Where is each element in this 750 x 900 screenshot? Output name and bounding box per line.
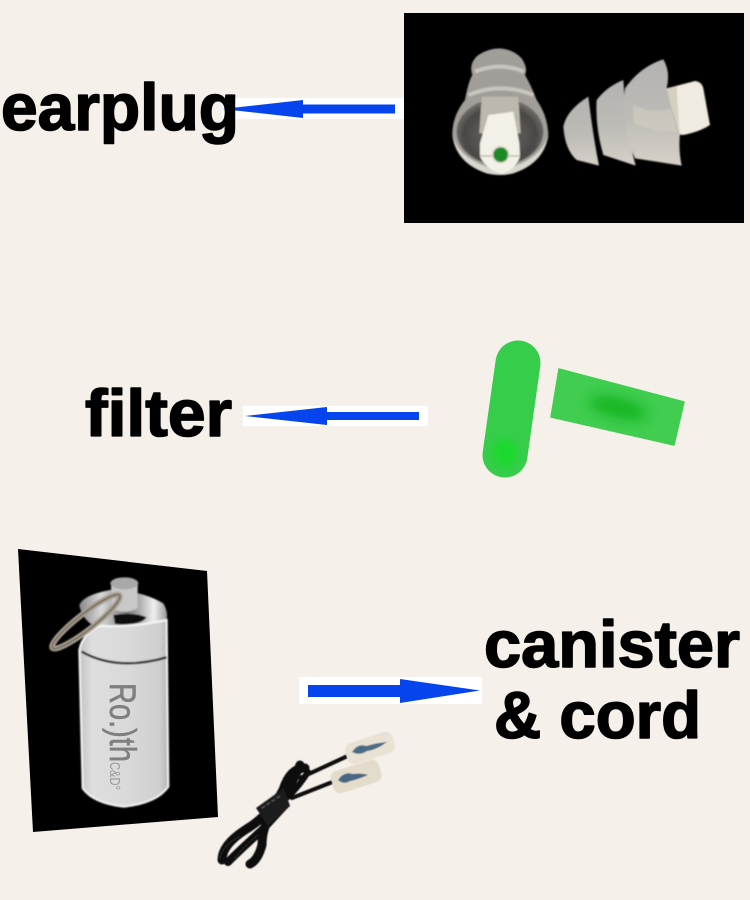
heading: earplug: earplug (1, 70, 239, 144)
cord earplug lower (329, 758, 383, 795)
panel: earplug photo (404, 13, 744, 223)
icon: green filters (493, 363, 684, 467)
heading: canister and cord: & cord (494, 678, 701, 752)
icon: earplug seen from the side (563, 59, 710, 166)
arrow: earplug label to photo (222, 98, 404, 119)
panel: canister photo (18, 549, 218, 832)
icon: metal canister (47, 577, 168, 807)
cord coil (220, 754, 352, 864)
icon: earplug seen from the open end (452, 48, 548, 175)
icon: black cord with earplugs (220, 730, 397, 864)
canister logo: Ro.)th (102, 683, 143, 762)
icon: upright filter (493, 363, 518, 467)
heading: filter: filter (85, 376, 232, 450)
body (79, 620, 168, 807)
cord earplug upper (343, 730, 397, 766)
groove (82, 652, 167, 663)
canister logo suffix: C&D° (106, 762, 123, 790)
icon: angled filter (551, 369, 684, 445)
heading: canister and cord: canister (484, 607, 740, 681)
arrow: filter label to filter parts (243, 406, 428, 426)
heading: canister and cord (484, 607, 740, 752)
knob (111, 583, 138, 612)
cap (79, 590, 167, 627)
keyring (47, 589, 125, 654)
arrow: canister and cord to label (299, 677, 482, 704)
